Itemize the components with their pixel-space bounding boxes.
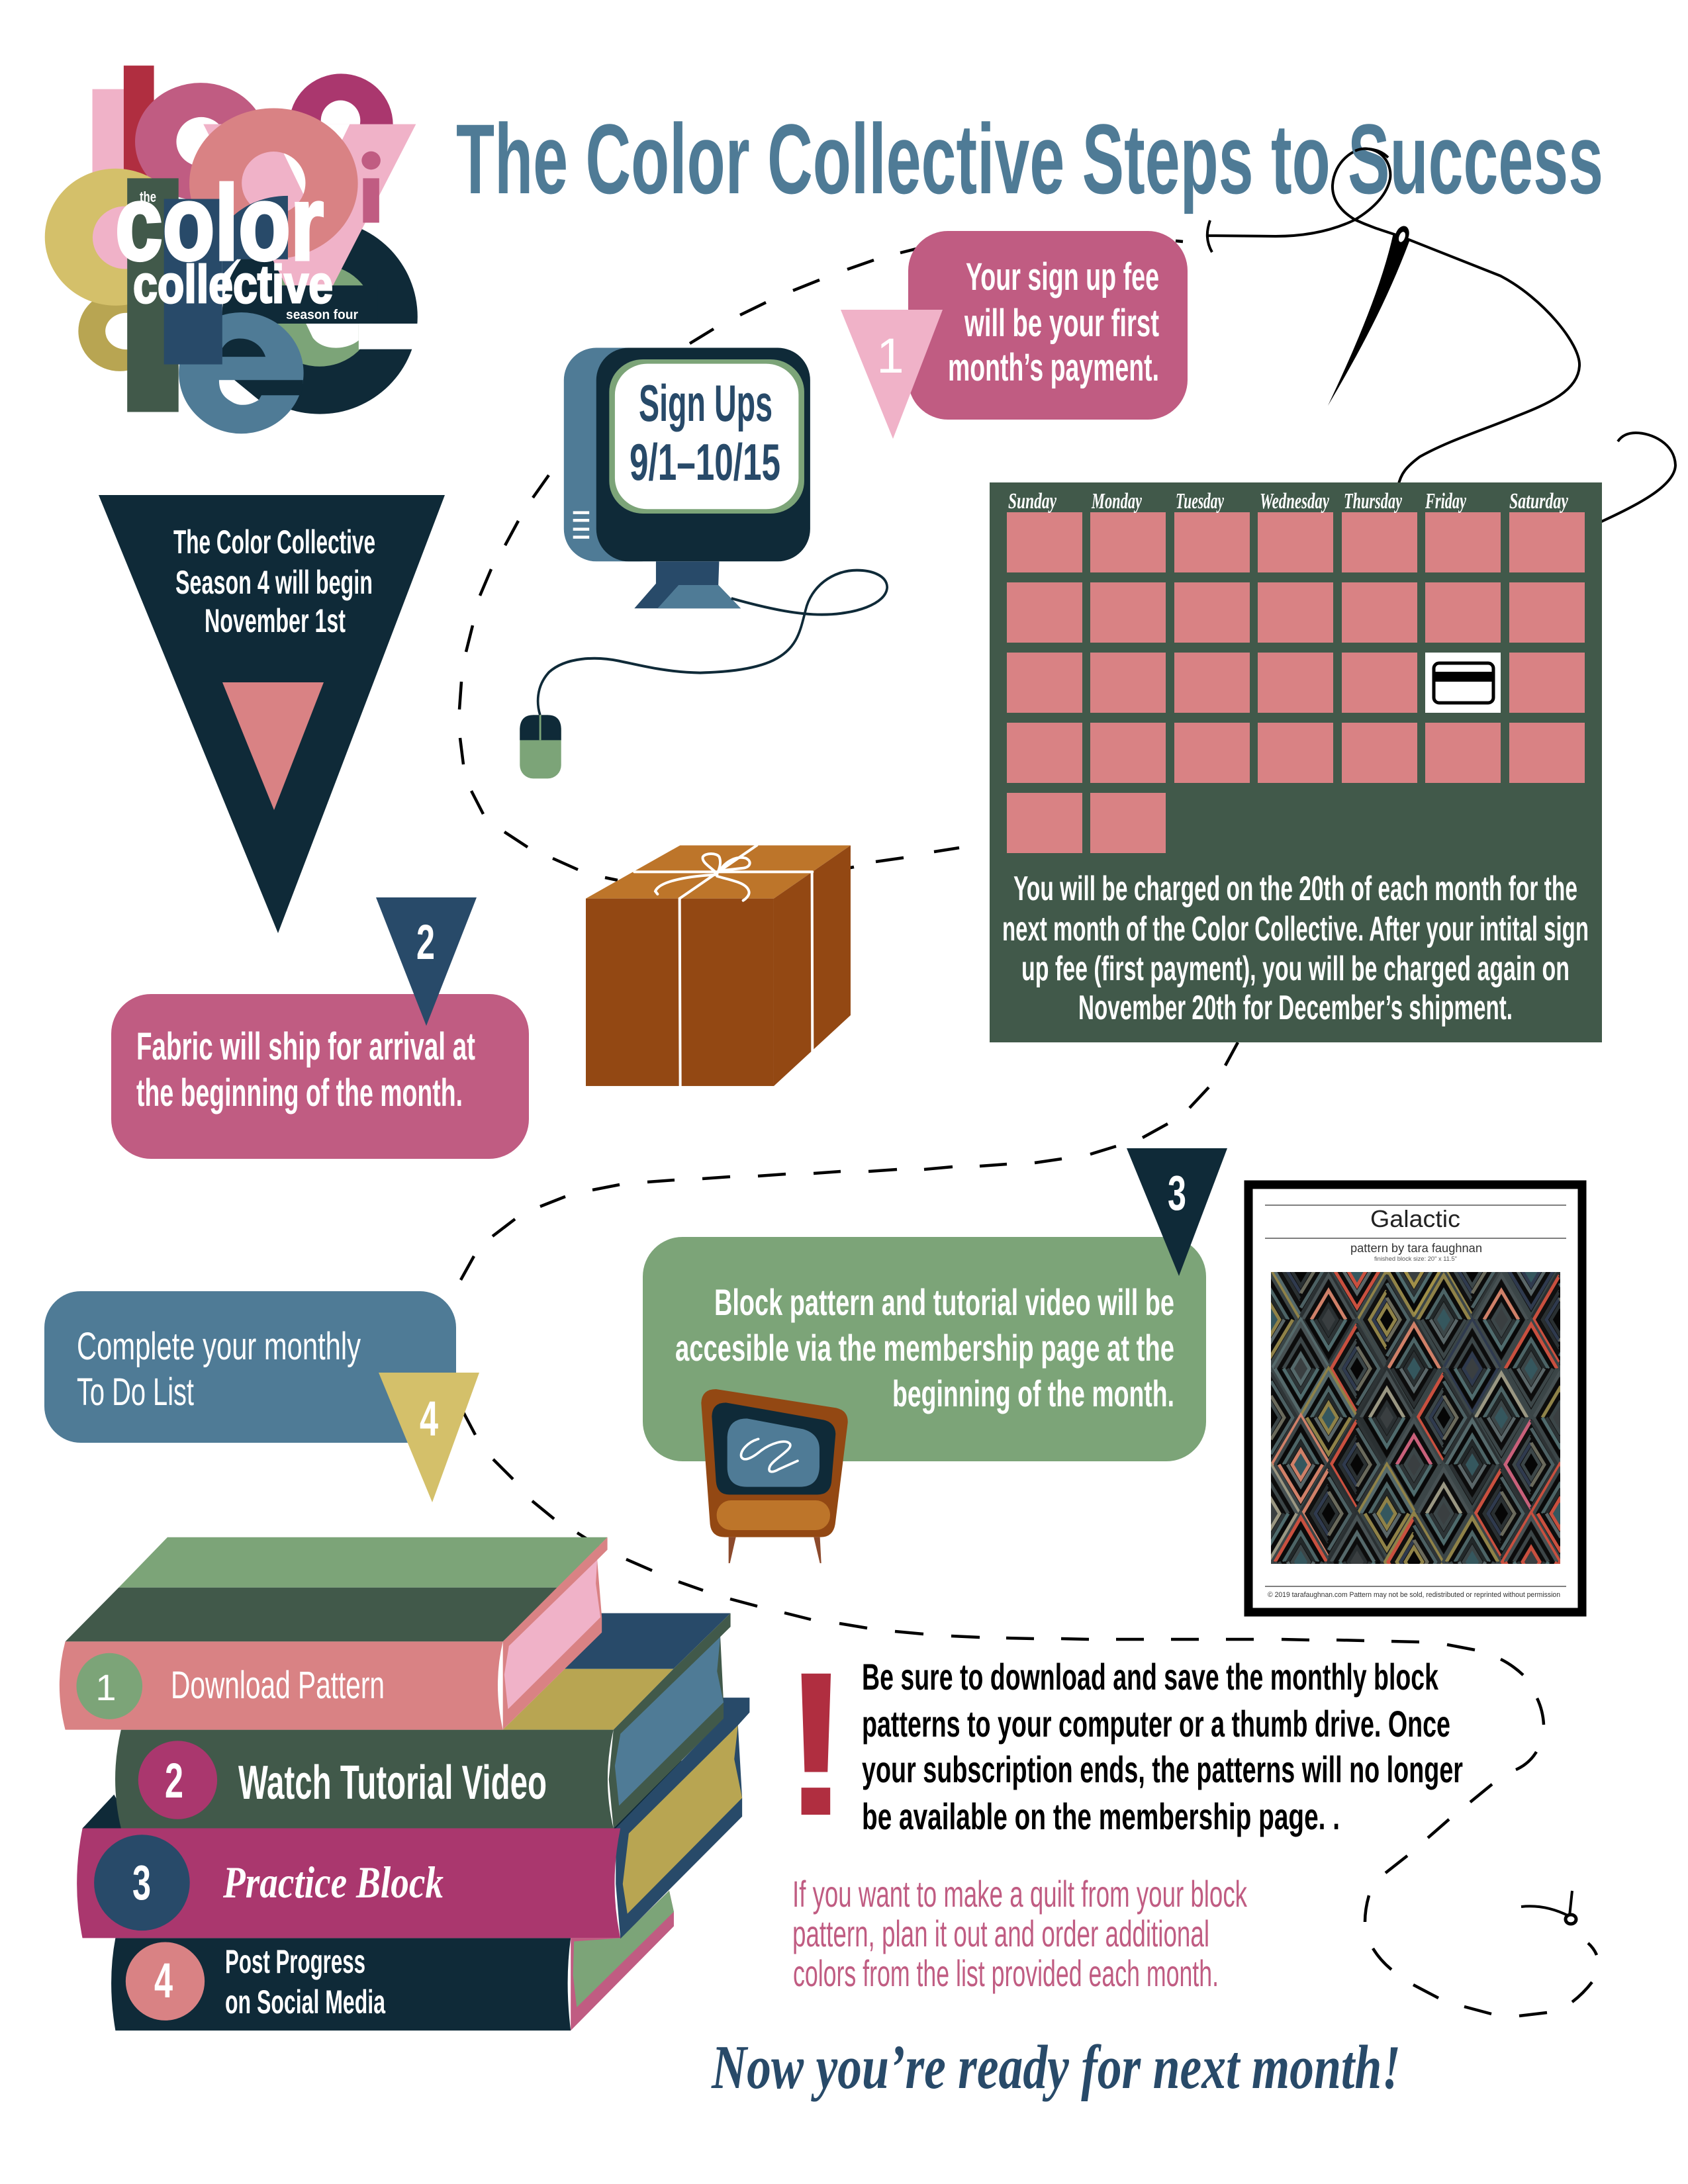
step marker 2: 2	[416, 915, 435, 970]
quilt image	[1271, 1272, 1560, 1564]
weekday labels: Monday	[1091, 489, 1143, 514]
callout: step 2 fabric shipping: Fabric will ship for arrival at	[136, 1025, 475, 1068]
icon: credit card on the 20th	[1425, 653, 1501, 713]
weekday labels: Wednesday	[1260, 489, 1330, 514]
weekday labels: Tuesday	[1176, 489, 1225, 514]
icon: computer monitor with mouse	[520, 348, 887, 778]
logo: the color collective season four	[45, 66, 421, 433]
step marker 1	[841, 310, 943, 439]
callout: step 1 sign up fee: month’s payment.	[948, 346, 1159, 389]
callout: step 1 sign up fee: will be your first	[964, 302, 1159, 345]
icon: shipping box	[586, 845, 851, 1086]
book 3 label: 3	[132, 1855, 151, 1910]
logo: the color collective season four: season four	[286, 308, 358, 322]
book 3 label: Practice Block	[222, 1857, 444, 1907]
book 4 label	[154, 1943, 386, 2021]
panel: season start triangle: The Color Collective	[173, 523, 375, 561]
panel: Galactic pattern cover: finished block size: 20" x 11.5"	[1374, 1255, 1457, 1262]
weekday labels	[1008, 489, 1569, 514]
step marker 4	[379, 1373, 479, 1502]
book 3 label	[132, 1855, 444, 1910]
icon: exclamation mark: !	[782, 1629, 851, 1858]
thread segment over the letter S	[1355, 149, 1388, 158]
panel: Galactic pattern cover: © 2019 tarafaughnan.com Pattern may not be sold, redistributed or reprinted without permission	[1268, 1591, 1560, 1599]
weekday labels: Thursday	[1344, 489, 1403, 514]
icon: needle	[1328, 224, 1412, 406]
illustration: stack of four books	[60, 1537, 749, 2030]
panel: Galactic pattern cover: Galactic	[1370, 1205, 1460, 1232]
weekday labels: Sunday	[1008, 489, 1057, 514]
callout: step 1 sign up fee: Your sign up fee	[966, 255, 1159, 298]
step marker 2	[376, 897, 477, 1026]
callout: to do list: Complete your monthly	[77, 1325, 361, 1368]
icon: computer monitor with mouse: Sign Ups	[639, 374, 773, 432]
book 1 label: Download Pattern	[171, 1664, 385, 1707]
callout: step 3 block pattern: accesible via the membership page at the	[675, 1327, 1174, 1369]
book 4 label: 4	[154, 1953, 173, 2008]
text block: download reminder: be available on the membership page. .	[862, 1796, 1340, 1837]
panel: Galactic pattern cover: pattern by tara faughnan	[1350, 1242, 1482, 1255]
logo: the color collective season four: color	[115, 163, 324, 282]
book 1 label: 1	[95, 1666, 117, 1708]
callout: step 3 block pattern: Block pattern and tutorial video will be	[714, 1281, 1174, 1323]
step marker 1: 1	[876, 328, 904, 383]
panel: season start triangle: Season 4 will begin	[175, 564, 373, 601]
logo: the color collective season four: the	[140, 189, 156, 205]
callout: step 3 block pattern	[643, 1237, 1206, 1461]
step marker 3	[1127, 1148, 1227, 1276]
callout: to do list: To Do List	[77, 1371, 194, 1414]
panel: season start triangle: November 1st	[205, 602, 346, 639]
dashed stitching path	[459, 241, 1597, 2016]
callout: step 3 block pattern: beginning of the month.	[892, 1373, 1174, 1414]
step marker 4: 4	[420, 1391, 438, 1446]
calendar day cells	[1007, 512, 1585, 853]
text block: make a quilt note: If you want to make a quilt from your block	[792, 1873, 1248, 1915]
icon: thread knot at end of stitching	[1521, 1891, 1576, 1924]
panel: Galactic pattern cover	[1242, 1185, 1589, 1612]
text block: make a quilt note	[792, 1873, 1248, 1994]
closing line: Now you’re ready for next month!	[711, 2033, 1401, 2102]
book 2 label: 2	[165, 1753, 183, 1808]
book 1 label	[95, 1664, 385, 1708]
text block: download reminder	[862, 1656, 1463, 1837]
thread: needle thread through the title	[1207, 149, 1579, 486]
logo: the color collective season four: collective	[133, 255, 333, 314]
calendar billing text	[1002, 870, 1589, 1027]
book 4 label: Post Progress	[225, 1943, 365, 1980]
icon: retro television	[701, 1389, 848, 1563]
weekday labels: Friday	[1425, 489, 1467, 514]
callout: step 2 fabric shipping: the beginning of the month.	[136, 1071, 463, 1115]
panel: season start triangle	[99, 495, 445, 933]
callout: to do list	[44, 1291, 456, 1443]
step marker 3: 3	[1168, 1165, 1186, 1220]
callout: step 1 sign up fee	[908, 231, 1188, 420]
text block: make a quilt note: colors from the list provided each month.	[793, 1952, 1219, 1994]
panel: billing calendar	[990, 482, 1602, 1042]
text block: make a quilt note: pattern, plan it out and order additional	[792, 1913, 1209, 1954]
weekday labels: Saturday	[1509, 489, 1569, 514]
callout: step 2 fabric shipping	[111, 994, 529, 1159]
icon: computer monitor with mouse: 9/1–10/15	[630, 433, 780, 491]
book 2 label: Watch Tutorial Video	[238, 1756, 547, 1809]
book 2 label	[165, 1753, 547, 1809]
thread: right loop behind calendar	[1599, 433, 1675, 523]
book 4 label: on Social Media	[225, 1983, 386, 2021]
